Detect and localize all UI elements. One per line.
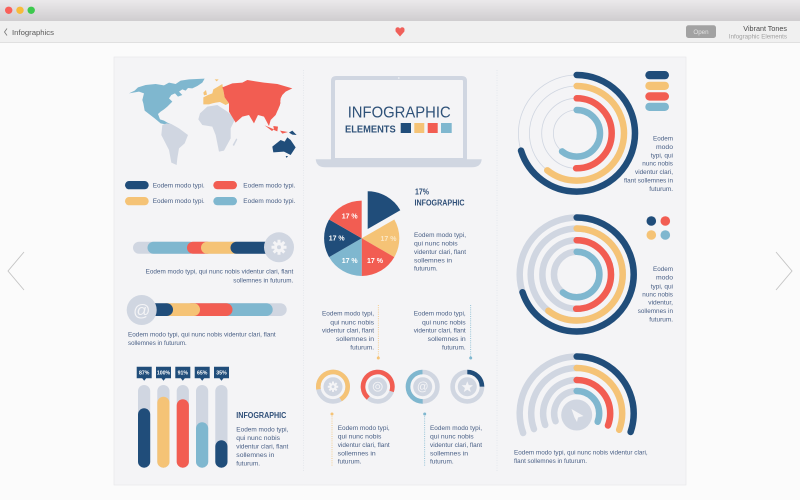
pie chart: 17 %	[329, 236, 345, 242]
pie chart: 17 %	[342, 214, 358, 220]
text: radial note one: flant sollemnes in	[624, 177, 673, 184]
text: bar chart note: sollemnes in	[236, 452, 275, 459]
text: radial note two: sollemnes in	[638, 308, 673, 315]
text: bar chart note: INFOGRAPHIC	[236, 411, 286, 420]
text: pie note: Eodem modo typi,	[414, 232, 466, 239]
map: africa	[198, 105, 238, 152]
text: bar chart note	[236, 411, 288, 467]
text: bottom right note: futurum.	[430, 459, 454, 466]
text: top left note	[322, 311, 375, 351]
text: pie note: futurum.	[414, 266, 438, 273]
text: pie note: sollemnes in	[414, 258, 452, 264]
text: top left note: sollemnes in	[336, 336, 374, 343]
text: top left note: futurum.	[350, 344, 374, 351]
back button: Infographics	[12, 28, 54, 37]
icon: at: @	[133, 301, 150, 320]
text: gear bar caption	[146, 268, 293, 284]
text: gear bar caption: Eodem modo typi, qui nunc nobis videntur clari, flant	[146, 268, 293, 275]
legend dots	[646, 216, 670, 240]
radial chart: thick rings	[520, 218, 634, 332]
text: pie note: qui nunc nobis	[414, 240, 458, 248]
arrow: next	[776, 252, 792, 290]
toolbar	[0, 21, 800, 43]
infographic sheet	[114, 57, 686, 485]
text: radial note two: typi, qui	[651, 283, 673, 290]
pie chart: 17 %	[342, 258, 358, 265]
colour squares	[401, 123, 411, 133]
text: semi radial note: Eodem modo typi, qui nunc nobis videntur clari,	[514, 450, 648, 457]
text: bottom right note: videntur clari, flant	[430, 442, 482, 449]
text: bottom left note: qui nunc nobis	[338, 434, 382, 441]
app name: Infographic Elements	[729, 34, 787, 40]
text: pie note: 17%	[415, 188, 429, 196]
text: radial note one: modo	[656, 144, 673, 151]
map legend: Eodem modo typi.	[153, 183, 205, 190]
text: top right note: sollemnes in	[428, 336, 466, 343]
value tags	[137, 367, 229, 381]
ring icon: target	[357, 366, 398, 407]
text: pie note: videntur clari, flant	[414, 249, 466, 256]
map legend: Eodem modo typi.	[243, 183, 295, 190]
open button: Open	[693, 29, 709, 36]
vertical bar chart: 87%	[139, 371, 150, 377]
map: oceania	[272, 131, 297, 158]
text: radial note one: typi, qui	[651, 152, 673, 159]
map: south america	[161, 123, 188, 165]
text: bottom left note: futurum.	[338, 459, 361, 466]
pie chart: 17 %	[381, 236, 397, 243]
text: at bar caption: Eodem modo typi, qui nunc nobis videntur clari, flant	[128, 331, 276, 338]
text: bottom left note: Eodem modo typi,	[338, 425, 390, 432]
text: radial note one: nunc nobis	[642, 161, 674, 168]
text: bottom right note: sollemnes in	[430, 450, 468, 457]
text: top left note: videntur clari, flant	[322, 328, 374, 335]
map: asia	[222, 80, 292, 134]
text: top right note: futurum.	[442, 344, 466, 351]
text: top right note: qui nunc nobis	[422, 319, 466, 326]
text: bottom right note: qui nunc nobis	[430, 434, 474, 441]
ring icon: gear	[316, 370, 350, 404]
text: bottom right note	[430, 425, 482, 466]
text: top right note	[414, 311, 466, 351]
text: pie note: INFOGRAPHIC	[414, 198, 465, 208]
map legend	[125, 181, 295, 205]
laptop: ELEMENTS	[345, 124, 396, 135]
legend pills	[645, 71, 669, 111]
map: north america	[129, 79, 205, 125]
text: radial note two	[638, 266, 674, 323]
vertical bar chart: 35%	[216, 371, 227, 377]
map legend: Eodem modo typi.	[243, 198, 295, 205]
ring icon: at: @	[417, 382, 429, 394]
text: pie note	[414, 188, 466, 273]
laptop	[316, 77, 482, 167]
text: radial note one: videntur clari,	[635, 169, 673, 176]
connector: yellow top	[377, 305, 380, 360]
laptop title: INFOGRAPHIC	[348, 104, 451, 121]
text: radial note one	[624, 135, 674, 193]
ring icon: star	[453, 372, 482, 401]
pie chart	[324, 191, 400, 276]
map legend: Eodem modo typi.	[153, 198, 205, 205]
text: bar chart note: qui nunc nobis	[236, 435, 281, 442]
icon: paper plane	[572, 409, 584, 422]
icon: heart	[395, 27, 405, 36]
text: semi radial note: flant sollemnes in futurum.	[514, 458, 587, 465]
vertical bar chart: 100%	[157, 371, 171, 377]
semi radial chart	[504, 340, 650, 487]
pie chart: 17 %	[367, 258, 384, 265]
text: radial note two: Eodem	[653, 266, 673, 273]
exploded slice	[368, 191, 400, 229]
window title bar	[0, 0, 800, 21]
text: radial note two: videntur,	[648, 300, 673, 307]
text: gear bar caption: sollemnes in futurum.	[233, 277, 293, 284]
text: top left note: qui nunc nobis	[330, 319, 375, 326]
connector: yellow bottom	[330, 412, 334, 466]
progress bar: at sign	[127, 295, 287, 325]
text: bottom left note	[338, 425, 390, 466]
text: bar chart note: Eodem modo typi,	[236, 426, 288, 434]
vertical bar chart: 91%	[178, 371, 188, 377]
icon: gear	[268, 237, 290, 258]
open button	[686, 25, 716, 38]
radial chart: thin rings	[518, 75, 635, 192]
connector: blue bottom	[423, 412, 426, 466]
app name	[729, 24, 787, 40]
vertical bar chart	[137, 367, 229, 468]
text: bottom left note: videntur clari, flant	[338, 442, 390, 449]
text: bar chart note: videntur clari, flant	[236, 444, 288, 451]
text: radial note two: modo	[656, 275, 673, 282]
text: top left note: Eodem modo typi,	[322, 311, 374, 318]
text: at bar caption: sollemnes in futurum.	[128, 340, 187, 347]
text: bar chart note: futurum.	[236, 460, 260, 467]
ring icon: at	[408, 372, 437, 401]
text: bottom left note: sollemnes in	[338, 450, 376, 457]
text: semi radial note	[514, 450, 648, 465]
text: bottom right note: Eodem modo typi,	[430, 425, 482, 432]
text: radial note two: nunc nobis	[642, 291, 674, 298]
vertical bar chart: 65%	[197, 371, 208, 377]
app name: Vibrant Tones	[743, 24, 787, 33]
text: top right note: videntur clari, flant	[414, 328, 466, 335]
text: radial note two: futurum.	[649, 316, 673, 323]
map: europe	[203, 79, 229, 105]
text: radial note one: futurum.	[649, 186, 673, 193]
progress bar: gear	[133, 232, 294, 262]
text: at bar caption	[128, 331, 276, 347]
arrow: previous	[8, 252, 24, 290]
connector: blue top	[469, 305, 472, 360]
text: radial note one: Eodem	[653, 135, 673, 142]
world map	[129, 79, 297, 165]
text: top right note: Eodem modo typi,	[414, 311, 466, 318]
